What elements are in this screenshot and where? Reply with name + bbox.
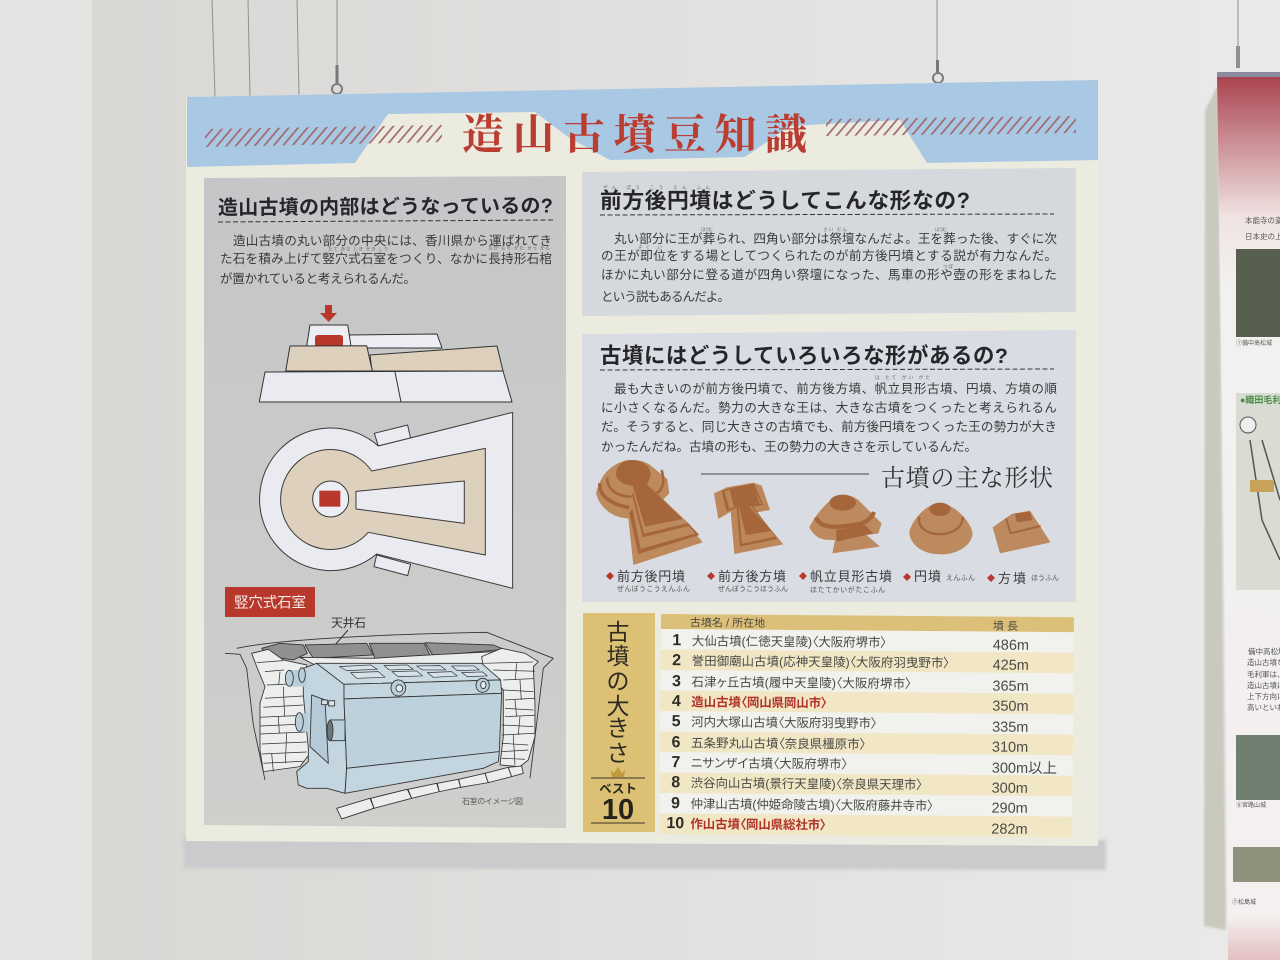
dashed rule xyxy=(600,369,1054,370)
body text: ほかに丸い部分に登る道が四角い祭壇になった、馬車の形や壺の形をまねした xyxy=(601,268,1057,282)
body text: ほ たて がい がた xyxy=(875,374,930,381)
shape labels: ほうふん xyxy=(1031,574,1059,582)
heading: 造山古墳の内部はどうなっているの? xyxy=(218,194,553,219)
body text xyxy=(220,234,552,286)
row 2: 誉田御廟山古墳(応神天皇陵)〈大阪府羽曳野市〉 xyxy=(692,653,950,670)
row 3 xyxy=(672,673,1029,695)
body text: 最も大きいのが前方後円墳で、前方後方墳、帆立貝形古墳、円墳、方墳の順 xyxy=(614,381,1057,396)
ranking table: 墳 長 xyxy=(993,620,1018,633)
row 8 xyxy=(671,774,1028,797)
poster text: ⑤宮路山城 xyxy=(1236,801,1266,809)
ranking title box: 大 xyxy=(606,693,630,719)
panel: tomb interior xyxy=(204,176,566,828)
poster text: ①備中高松城 xyxy=(1236,339,1272,347)
row 9: 9 xyxy=(671,795,680,812)
heading: 古墳にはどうしていろいろな形があるの? xyxy=(600,343,1008,368)
shape labels: 帆立貝形古墳 xyxy=(810,569,892,584)
coffin knobs xyxy=(285,668,489,741)
furigana xyxy=(603,184,953,270)
row 5: 335m xyxy=(992,720,1028,736)
row 2 xyxy=(672,652,1029,674)
furigana: ほうむ xyxy=(701,227,713,233)
row 4: 350m xyxy=(992,699,1029,715)
left stone wall xyxy=(252,649,310,772)
dashed rule xyxy=(600,214,1054,215)
title: 造山古墳豆知識 xyxy=(462,112,809,159)
body text: 丸い部分に王が葬られ、四角い部分は祭壇なんだよ。王を葬った後、すぐに次 xyxy=(614,232,1057,246)
body text: なが もち がた せっ かん xyxy=(488,244,550,252)
lid slots xyxy=(339,665,487,678)
ranking title box: ベスト xyxy=(599,782,637,796)
row 1: 大仙古墳(仁徳天皇陵)〈大阪府堺市〉 xyxy=(692,633,887,650)
panel: why keyhole shape xyxy=(582,168,1076,316)
row 6: 五条野丸山古墳〈奈良県橿原市〉 xyxy=(691,735,866,752)
body text: が置かれていると考えられるんだ。 xyxy=(220,272,416,286)
shapes heading: 古墳の主な形状 xyxy=(881,465,1053,492)
right stone wall xyxy=(482,648,538,767)
row 3: 3 xyxy=(672,673,681,690)
hatch stripes left xyxy=(205,125,442,147)
icon: square mound xyxy=(993,511,1051,553)
row 7: 7 xyxy=(671,754,680,771)
row 3: 365m xyxy=(992,679,1029,695)
icon: red down arrow xyxy=(320,305,337,322)
row 2: 425m xyxy=(993,658,1029,674)
heading: 前方後円墳はどうしてこんな形なの? xyxy=(600,188,970,213)
icon: scallop mound xyxy=(809,495,882,553)
furigana: つぼ xyxy=(943,263,953,270)
shape labels: 前方後方墳 xyxy=(718,569,786,584)
row 4: 造山古墳〈岡山県岡山市〉 xyxy=(691,694,827,710)
row 5 xyxy=(672,713,1028,736)
hatch stripes right xyxy=(826,116,1076,136)
body text xyxy=(601,232,1057,304)
row 8: 300m xyxy=(992,781,1028,797)
mound elevation diagram xyxy=(259,305,512,402)
shape labels: ぜんぼうこうえんふん xyxy=(617,585,690,593)
body text: という説もあるんだよ。 xyxy=(601,289,730,304)
shape labels: 前方後円墳 xyxy=(617,569,685,584)
main board xyxy=(186,80,1098,846)
furigana: そく い xyxy=(638,244,662,251)
panel: size ranking xyxy=(583,613,1074,838)
dashed rule xyxy=(218,220,553,222)
shape labels: ぜんぼうこうほうふん xyxy=(718,585,788,593)
poster photo 2 xyxy=(1236,735,1280,800)
floor stones xyxy=(337,766,523,819)
poster map xyxy=(1236,393,1280,590)
blue stone coffin chamber xyxy=(297,663,502,793)
right neighbouring poster xyxy=(1204,72,1280,960)
poster photo 3 xyxy=(1233,847,1280,882)
label: ceiling stone xyxy=(331,616,366,645)
body text xyxy=(601,374,1057,454)
furigana: ほうむ xyxy=(935,227,947,233)
mound plan diagram xyxy=(260,412,513,588)
body text: に小さくなるんだ。勢力の大きな王は、大きな古墳をつくったと考えられるん xyxy=(601,401,1057,415)
row 10 xyxy=(666,815,1028,838)
label: ceiling stone: 天井石 xyxy=(331,616,366,630)
row 5: 5 xyxy=(672,713,681,730)
row 10: 作山古墳〈岡山県総社市〉 xyxy=(690,816,826,832)
ranking title box: 墳 xyxy=(606,643,630,669)
body text: かったんだね。古墳の形も、王の勢力の大きさを示しているんだ。 xyxy=(601,440,977,454)
ranking table xyxy=(659,614,1074,838)
ranking title box: 古 xyxy=(606,619,630,645)
row 2: 2 xyxy=(672,652,681,669)
row 3: 石津ヶ丘古墳(履中天皇陵)〈大阪府堺市〉 xyxy=(691,674,912,691)
capstones xyxy=(262,643,504,660)
poster text xyxy=(1232,215,1280,906)
icon: keyhole mound xyxy=(596,460,703,565)
row 7: 300m以上 xyxy=(992,760,1057,777)
body text: の王が即位をする場としてつくられたのが前方後円墳とする説が有力なんだ。 xyxy=(601,248,1057,263)
body text: た石を積み上げて竪穴式石室をつくり、なかに長持形石棺 xyxy=(220,252,552,266)
ranking title box xyxy=(583,613,655,832)
row 5: 河内大塚山古墳〈大阪府羽曳野市〉 xyxy=(691,714,877,731)
row 9: 290m xyxy=(991,801,1028,817)
row 7 xyxy=(671,754,1057,777)
row 9: 仲津山古墳(仲姫命陵古墳)〈大阪府藤井寺市〉 xyxy=(690,796,934,813)
row 1: 1 xyxy=(672,632,681,649)
label: vertical stone chamber: 竪穴式石室 xyxy=(234,594,306,612)
row 7: ニサンザイ古墳〈大阪府堺市〉 xyxy=(691,755,848,771)
row 1 xyxy=(672,632,1029,654)
furigana: ぜん ぼう こう えん ふん xyxy=(603,184,710,191)
row 10: 282m xyxy=(991,822,1028,838)
shape labels: ほたてかいがたこふん xyxy=(810,585,885,594)
body text: だ。そうすると、同じ大きさの古墳でも、前方後円墳をつくった王の勢力が大き xyxy=(601,419,1057,434)
icon: square front-and-rear mound xyxy=(714,483,783,554)
row 4: 4 xyxy=(672,693,681,710)
row 4 xyxy=(672,693,1029,715)
row 8: 8 xyxy=(671,774,680,791)
body text: 造山古墳の丸い部分の中央には、香川県から運ばれてき xyxy=(233,234,552,248)
row 10: 10 xyxy=(666,815,684,832)
ranking table: 古墳名 / 所在地 xyxy=(690,615,765,630)
shape labels: 円墳 xyxy=(914,569,941,584)
row 6: 6 xyxy=(671,734,681,751)
hanging wires and hooks xyxy=(212,0,1240,97)
shape labels: 方墳 xyxy=(998,571,1026,586)
body text: たて あな しき せき しつ xyxy=(328,246,388,252)
stone chamber illustration xyxy=(225,632,553,819)
ranking title box: の xyxy=(606,668,630,694)
icon: crown xyxy=(611,767,625,777)
ranking title box: さ xyxy=(606,740,630,766)
row 1: 486m xyxy=(993,638,1029,654)
panel: why various shapes xyxy=(582,330,1076,602)
row 6 xyxy=(671,734,1028,756)
poster text: ⑦松島城 xyxy=(1232,898,1256,906)
ranking title box: き xyxy=(606,715,630,741)
label: vertical stone chamber xyxy=(225,587,315,617)
row 8: 渋谷向山古墳(景行天皇陵)〈奈良県天理市〉 xyxy=(691,775,923,792)
white stone strip under capstones xyxy=(300,652,493,665)
row 6: 310m xyxy=(992,740,1028,756)
icon: round mound xyxy=(909,503,973,554)
header band xyxy=(187,80,1098,167)
shape labels: えんふん xyxy=(946,574,975,582)
earth outline xyxy=(225,632,553,780)
shape labels xyxy=(606,569,1059,594)
furigana: さい だん xyxy=(823,226,847,233)
row 9 xyxy=(671,795,1028,817)
caption: 石室のイメージ図 xyxy=(462,796,523,806)
poster photo 1 xyxy=(1236,249,1280,337)
panel shadow xyxy=(183,838,1106,870)
ranking title box: 10 xyxy=(602,794,634,826)
